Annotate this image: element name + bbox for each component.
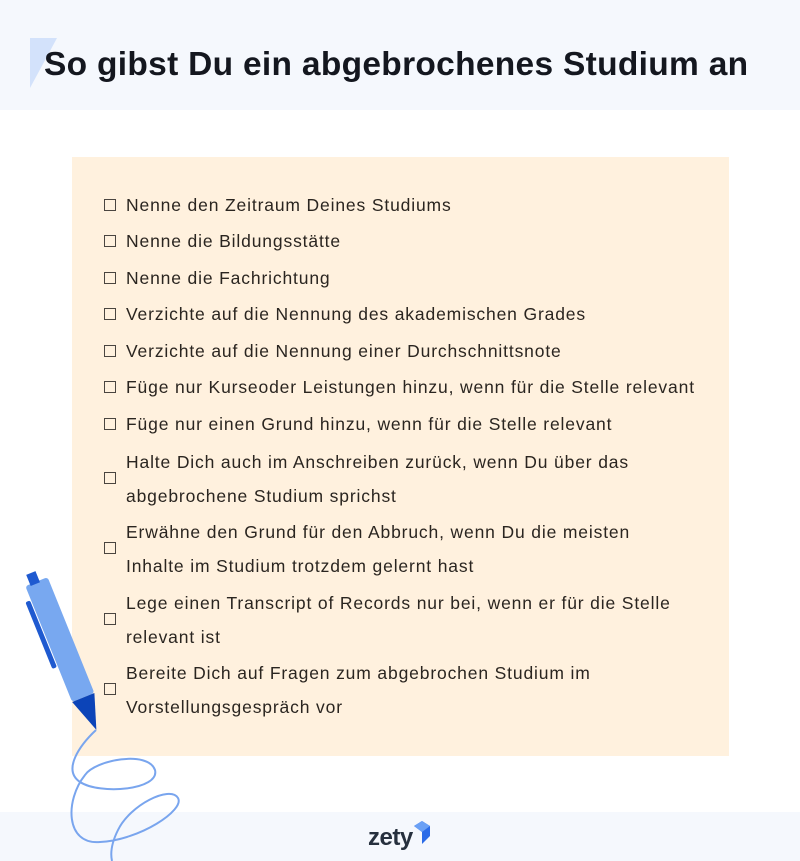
item 7 (104, 414, 612, 434)
panel: checklist: Erwähne den Grund für den Abbruch, wenn Du die meisten (126, 522, 630, 542)
item 1 (104, 195, 452, 215)
item 8 (104, 452, 629, 506)
item 4 (104, 304, 586, 324)
logo: zety: zety (368, 824, 413, 851)
title: So gibst Du ein abgebrochenes Studium an (44, 46, 748, 83)
panel: checklist: Nenne die Bildungsstätte (126, 231, 341, 251)
item 10 (104, 593, 671, 647)
panel: checklist: Inhalte im Studium trotzdem gelernt hast (126, 556, 474, 576)
item 11 (104, 663, 591, 717)
panel: checklist: Füge nur Kurseoder Leistungen hinzu, wenn für die Stelle relevant (126, 377, 695, 397)
icon: title triangle accent (30, 38, 57, 88)
item 5 (104, 341, 562, 361)
panel: checklist: relevant ist (126, 627, 221, 647)
item 6 (104, 377, 695, 397)
panel: checklist: Bereite Dich auf Fragen zum abgebrochen Studium im (126, 663, 591, 683)
panel: checklist: Halte Dich auch im Anschreiben zurück, wenn Du über das (126, 452, 629, 472)
panel: checklist: Verzichte auf die Nennung des akademischen Grades (126, 304, 586, 324)
panel: checklist: Nenne die Fachrichtung (126, 268, 331, 288)
item 2 (104, 231, 341, 251)
panel: checklist: abgebrochene Studium sprichst (126, 486, 397, 506)
item 9 (104, 522, 630, 576)
logo: zety (368, 821, 430, 851)
panel: checklist: Füge nur einen Grund hinzu, wenn für die Stelle relevant (126, 414, 612, 434)
panel: checklist: Vorstellungsgespräch vor (126, 697, 343, 717)
panel: checklist: Nenne den Zeitraum Deines Studiums (126, 195, 452, 215)
icon: pen with ink swirl (26, 571, 180, 861)
panel: checklist (72, 157, 729, 756)
panel: checklist: Verzichte auf die Nennung einer Durchschnittsnote (126, 341, 562, 361)
panel: checklist: Lege einen Transcript of Records nur bei, wenn er für die Stelle (126, 593, 671, 613)
item 3 (104, 268, 331, 288)
